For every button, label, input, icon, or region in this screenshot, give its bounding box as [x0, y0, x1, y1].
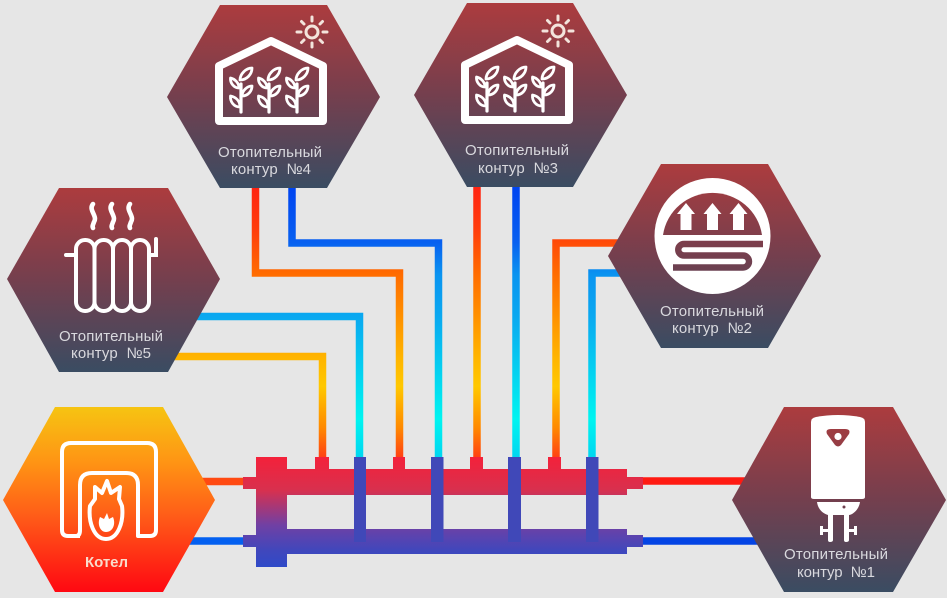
hexagon: [414, 3, 627, 187]
pipe: circuit 1 supply: [640, 477, 760, 485]
label: [465, 142, 569, 177]
label: [660, 303, 764, 337]
label: контур №4: [231, 161, 311, 178]
icon: water heater: [811, 415, 865, 542]
icon: sun: [297, 17, 327, 47]
icon: radiator: [66, 204, 156, 311]
icon: boiler: [62, 443, 156, 539]
label: контур №5: [71, 345, 151, 362]
hexagon: [7, 188, 220, 372]
label: Отопительный: [660, 303, 764, 320]
pipe: circuit 5 return: [190, 316, 360, 458]
hexagon: [3, 407, 215, 592]
pipe: circuit 4 supply: [256, 186, 400, 458]
label: контур №2: [672, 320, 752, 337]
manifold body: [243, 457, 643, 567]
pipe: circuit 3 supply: [473, 185, 481, 458]
icon: flame: [90, 481, 122, 539]
label: Отопительный: [465, 142, 569, 159]
pipe: circuit 4 return: [292, 186, 438, 458]
pipe: circuit 5 supply: [170, 356, 322, 458]
pipes: circuit connections: [170, 185, 780, 541]
pipe: boiler return: [185, 537, 245, 545]
pipe: circuit 2 supply: [556, 243, 640, 458]
label: Отопительный: [59, 328, 163, 345]
pipe: circuit 2 return: [592, 273, 640, 458]
panel: circuit 1 water heater: [732, 407, 946, 592]
panel: circuit 4 greenhouse: [167, 5, 380, 188]
hexagon: [732, 407, 946, 592]
icon: greenhouse: [465, 40, 569, 120]
label: [784, 546, 888, 581]
icon: valves: [820, 526, 857, 535]
hexagon: [167, 5, 380, 188]
label: [218, 144, 322, 178]
label: [59, 328, 163, 362]
panel: circuit 5 radiator: [7, 188, 220, 372]
icon: heat waves: [92, 204, 132, 228]
label: Отопительный: [784, 546, 888, 563]
icon: sun: [543, 16, 573, 46]
label: Отопительный: [218, 144, 322, 161]
icon: underfloor heating: [654, 178, 770, 294]
pipe: circuit 3 return: [512, 185, 520, 458]
label: контур №3: [478, 160, 558, 177]
panel: circuit 3 greenhouse: [414, 3, 627, 187]
hexagon: [608, 164, 821, 348]
pipe: circuit 1 return: [640, 537, 780, 545]
pipe: boiler supply: [200, 478, 245, 485]
icon: greenhouse: [219, 41, 323, 121]
manifold: [243, 457, 643, 567]
panel: circuit 2 underfloor heating: [608, 164, 821, 348]
label: контур №1: [797, 564, 875, 581]
manifold return risers: [354, 457, 598, 542]
label: Котел: [85, 554, 128, 571]
panel: boiler: [3, 407, 215, 592]
